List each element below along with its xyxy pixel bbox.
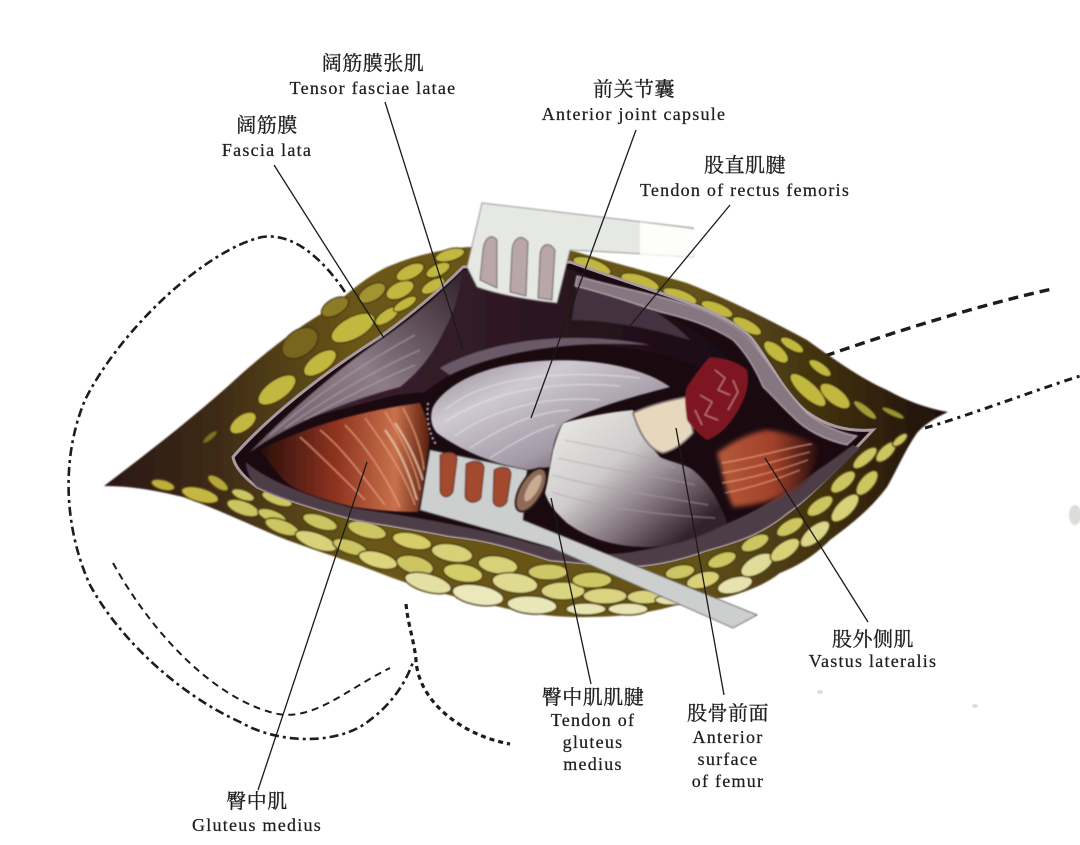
label: tendon of rectus femoris: 股直肌腱 <box>704 154 786 177</box>
upper retractor <box>467 203 695 303</box>
label: gluteus medius: 臀中肌 <box>226 790 288 813</box>
rectus femoris stump with red tendon mass <box>633 357 748 453</box>
upper right fascia flap <box>575 276 857 445</box>
lower fascia strip <box>246 445 860 566</box>
fascia lata flap <box>250 270 463 452</box>
label: tensor fasciae latae: Tensor fasciae latae <box>290 78 456 98</box>
wound cavity <box>233 262 873 566</box>
label: fascia lata: 阔筋膜 <box>236 114 298 137</box>
dashed body outline: hip and thigh <box>69 236 1080 744</box>
femur anterior surface and gluteus medius tendon <box>545 410 727 547</box>
label: tensor fasciae latae: 阔筋膜张肌 <box>322 52 424 75</box>
label: fascia lata: Fascia lata <box>222 140 312 160</box>
label: tendon of gluteus medius: gluteus <box>563 732 623 752</box>
label: tendon of rectus femoris: Tendon of rectus femoris <box>640 180 850 200</box>
label: anterior joint capsule: 前关节囊 <box>593 78 675 101</box>
fat lobules: lower band <box>150 431 909 616</box>
subcutaneous fat rim <box>104 245 948 617</box>
label: anterior surface of femur: Anterior <box>693 727 763 747</box>
anterior joint capsule <box>427 360 670 470</box>
gluteus medius tendon stump <box>509 464 553 516</box>
fat lobules: upper band <box>201 245 905 445</box>
label: tendon of gluteus medius: Tendon of <box>551 710 635 730</box>
label: anterior surface of femur: of femur <box>692 771 764 791</box>
label: anterior surface of femur: surface <box>698 749 758 769</box>
tensor fasciae latae: dark muscle <box>300 268 760 420</box>
leader lines <box>258 102 868 790</box>
label: tendon of gluteus medius: medius <box>563 754 623 774</box>
vastus lateralis muscle <box>717 430 820 507</box>
label: vastus lateralis: 股外侧肌 <box>832 628 914 651</box>
paper smudges <box>817 505 1080 708</box>
label: gluteus medius: Gluteus medius <box>192 815 322 835</box>
label: tendon of gluteus medius: 臀中肌肌腱 <box>542 686 644 709</box>
label: vastus lateralis: Vastus lateralis <box>809 651 937 671</box>
capsule suture edge <box>427 403 437 446</box>
lower retractor <box>420 450 757 628</box>
gluteus medius muscle <box>260 403 429 512</box>
label: anterior joint capsule: Anterior joint capsule <box>542 104 726 124</box>
label: anterior surface of femur: 股骨前面 <box>687 702 769 725</box>
